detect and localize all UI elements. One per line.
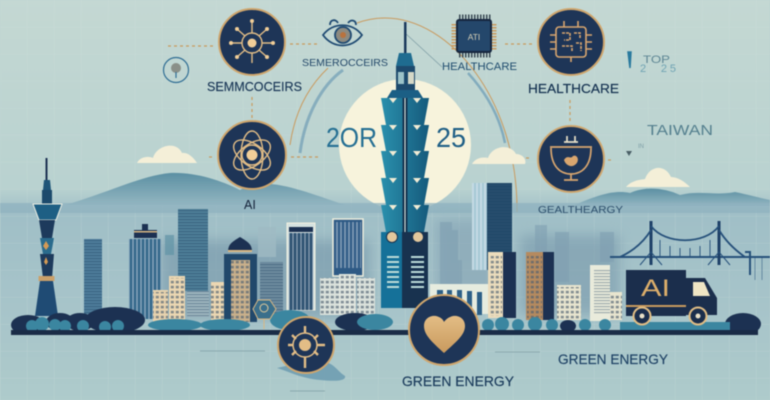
connector lines	[168, 44, 613, 160]
icon: bowl circle	[538, 126, 604, 192]
icon: heart circle	[409, 295, 479, 365]
label: top 2025: TOP	[643, 54, 670, 66]
year text 2025: 2OR	[326, 122, 377, 153]
icon: chip	[454, 17, 494, 55]
label: Taiwan	[626, 122, 713, 156]
year text 2025: 25	[436, 122, 466, 153]
road sign hexagon	[253, 300, 276, 329]
clouds	[137, 146, 690, 187]
label: green energy lower: GREEN ENERGY	[402, 373, 515, 389]
label: semiconductors small: SEMEROCCEIRS	[302, 57, 388, 69]
icon: network circle	[219, 9, 285, 75]
Taipei 101 tower	[381, 22, 429, 308]
mountains	[0, 173, 770, 213]
bridge	[610, 221, 770, 280]
left landmark tower	[33, 158, 62, 316]
year text 2025	[326, 122, 466, 153]
icon: gear circle	[277, 317, 345, 381]
label: top 2025	[628, 52, 676, 75]
icon: eye	[323, 20, 362, 46]
small marks	[200, 351, 540, 391]
label: Taiwan: TAIWAN	[647, 122, 713, 139]
label: Taiwan: IN	[638, 144, 644, 150]
label: health energy: GEALTHEARGY	[538, 204, 623, 216]
skyline: left buildings	[84, 209, 375, 322]
skyline: right buildings	[430, 183, 622, 321]
label: green energy right: GREEN ENERGY	[558, 352, 668, 367]
label: healthcare small: HEALTHCARE	[442, 61, 517, 73]
label: healthcare: HEALTHCARE	[528, 81, 619, 96]
delivery truck: AI	[641, 275, 670, 302]
icon: circuit circle	[538, 9, 604, 75]
ground with bushes	[11, 307, 761, 335]
delivery truck	[626, 270, 717, 324]
sun with arcs	[290, 18, 517, 212]
label: top 2025: 2 25	[640, 63, 676, 75]
icon: atom circle	[218, 121, 286, 189]
label: AI: AI	[244, 198, 256, 212]
icon: chip: ATI	[468, 32, 480, 42]
small lightbulb icon	[164, 58, 188, 82]
label: semiconductors: SEMMCOCEIRS	[207, 80, 302, 94]
